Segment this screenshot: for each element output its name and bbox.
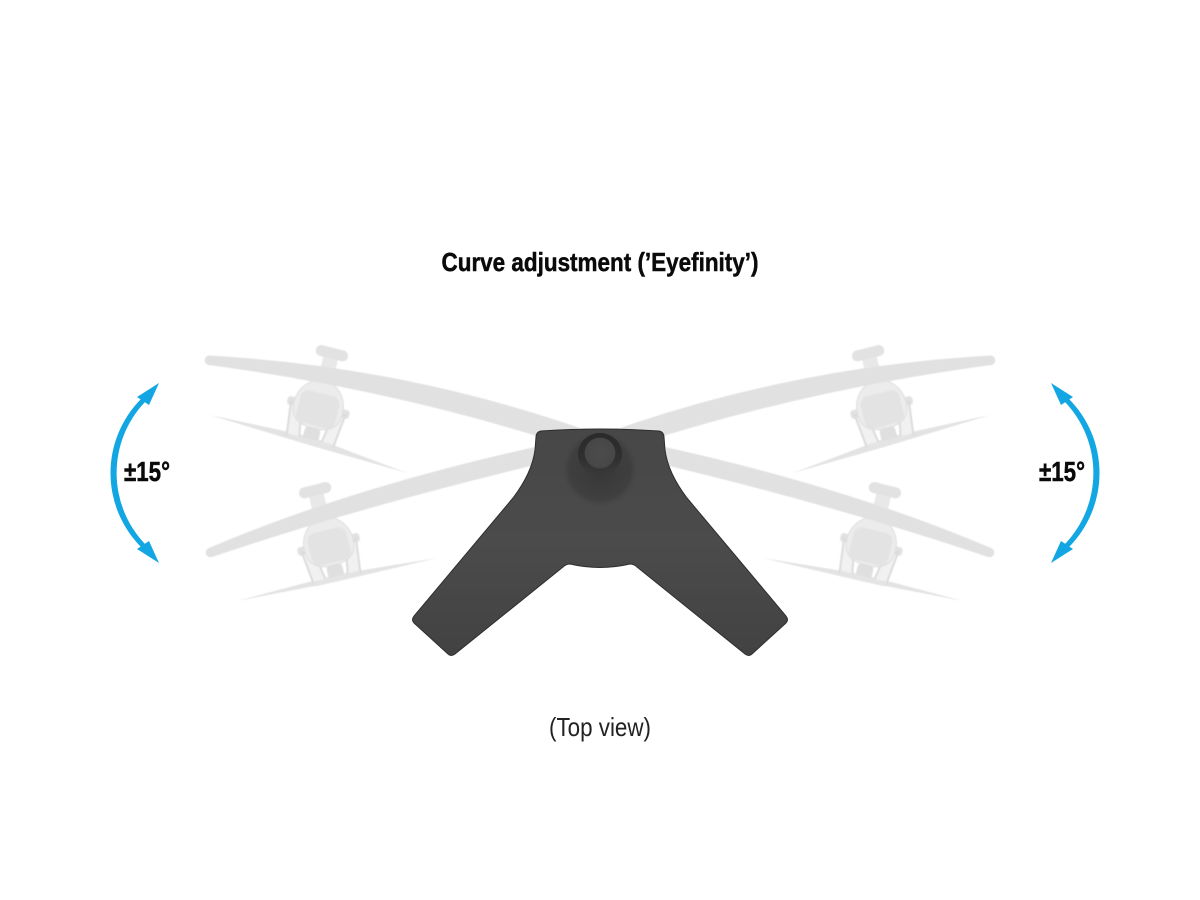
caption: (Top view)	[549, 712, 651, 742]
monitor: top right position	[620, 340, 995, 473]
title: Curve adjustment (’Eyefinity’)	[442, 247, 758, 277]
stand base	[412, 429, 788, 656]
monitor: bottom right position	[665, 447, 994, 601]
right rotation arrow	[1051, 383, 1100, 563]
pivot ball	[578, 433, 622, 475]
left angle label: ±15°	[124, 456, 170, 487]
left rotation arrow	[110, 383, 159, 563]
monitor: bottom left position	[206, 447, 535, 601]
base shadow around pivot	[562, 431, 638, 507]
right angle label: ±15°	[1039, 456, 1085, 487]
monitor positions: four faded positions	[205, 340, 995, 601]
monitor: top left position	[205, 340, 580, 473]
